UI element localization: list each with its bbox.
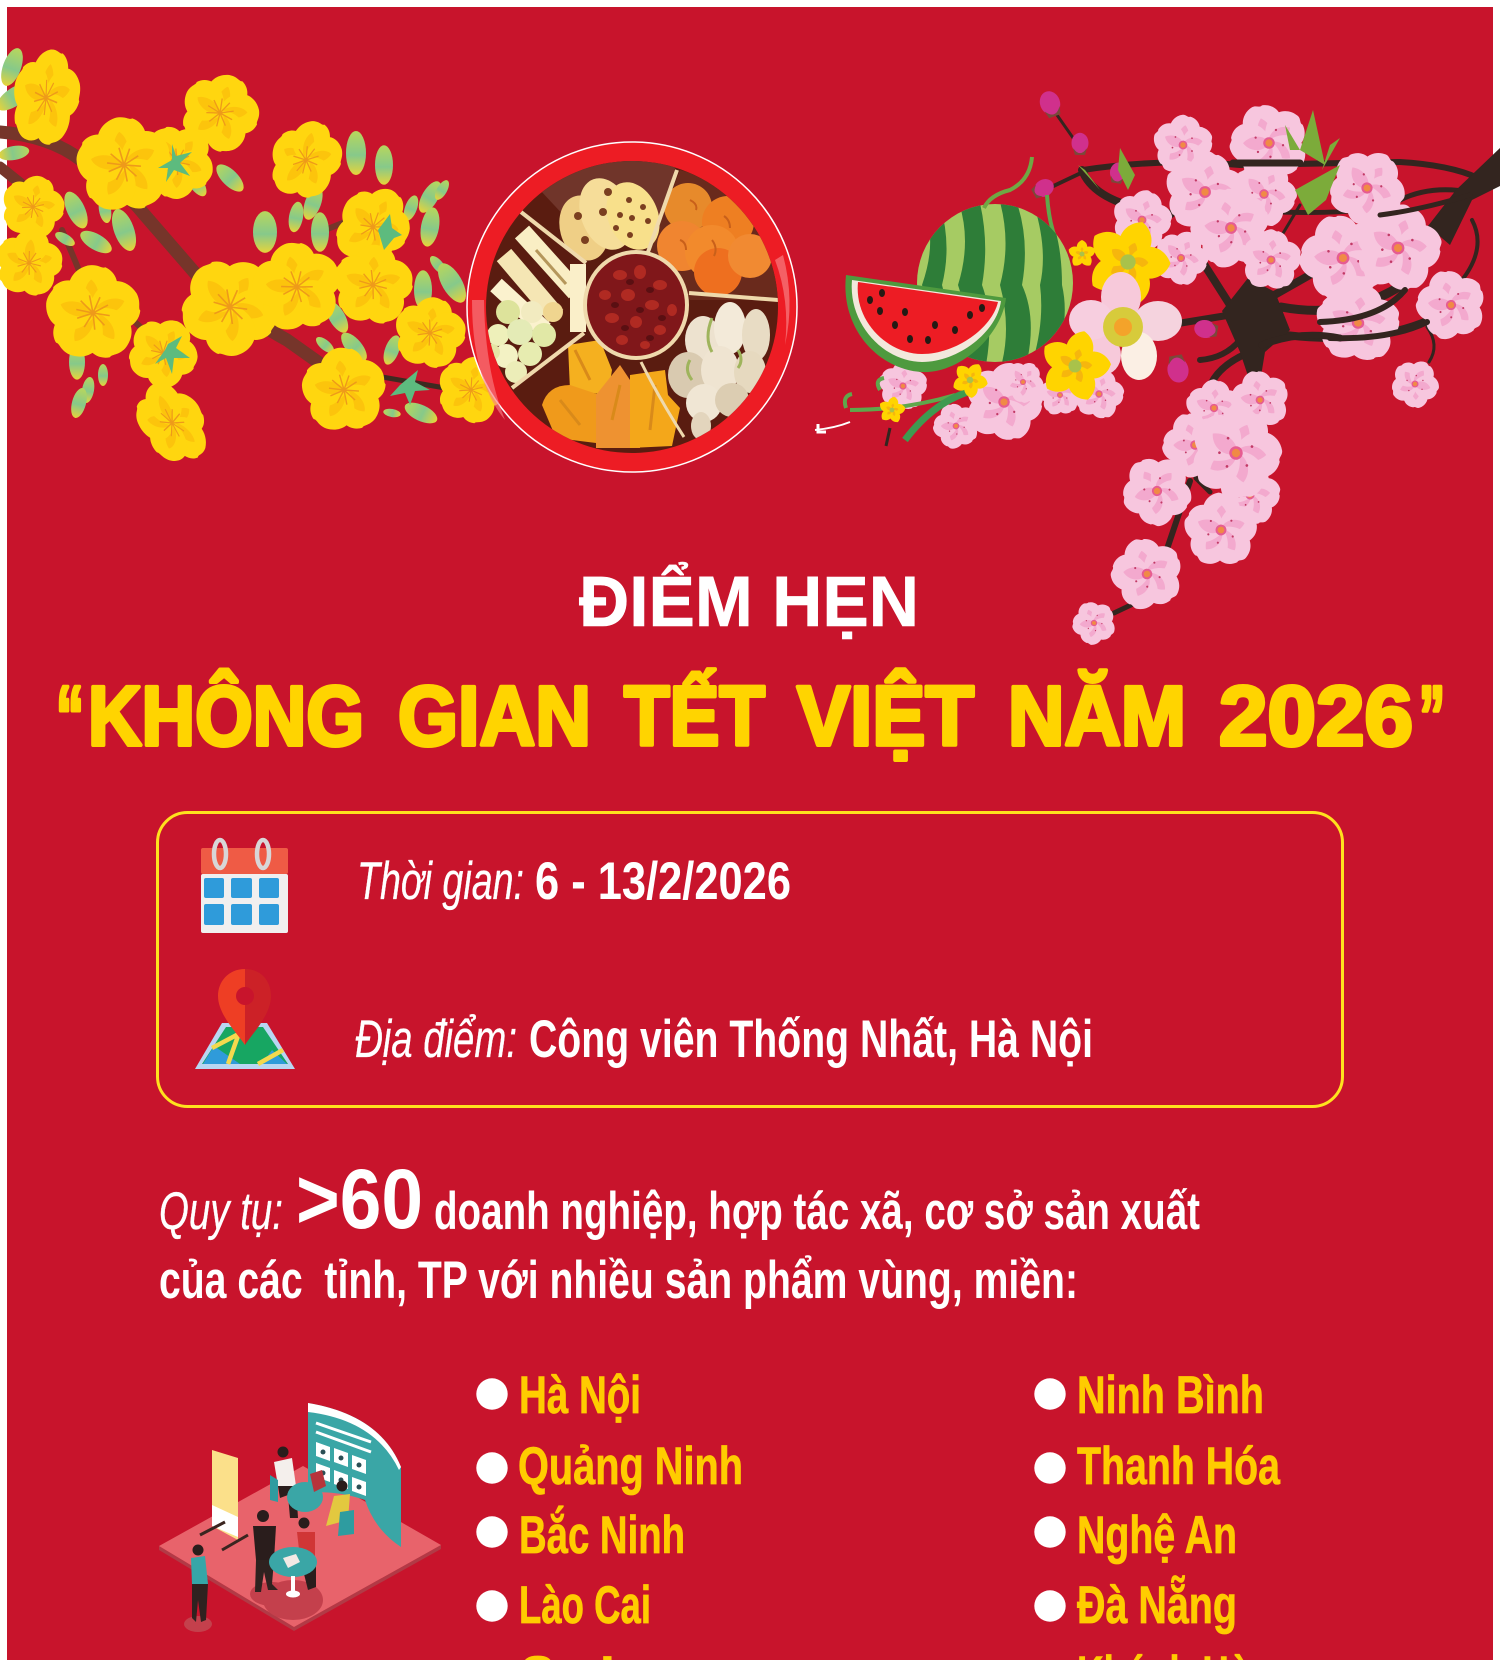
main title: GIAN [398,669,591,763]
shadows [184,1580,323,1632]
list of provinces right column: Đà Nẵng [1077,1574,1237,1635]
lotus root slices [559,178,660,260]
tree hub [1222,148,1500,382]
dark branches [1045,105,1478,613]
venue text [355,1010,1093,1069]
main title [56,669,1445,763]
list of provinces right column: Ninh Bình [1077,1366,1264,1425]
pink flowers lower cluster [1064,366,1301,654]
main title: NĂM [1008,669,1186,763]
list of provinces left column [476,1366,743,1660]
round table front [269,1547,317,1598]
dried pistachios [668,302,770,440]
green sepals [155,144,430,405]
venue text: Địa điểm: [355,1010,517,1069]
summary text: >60 [296,1152,423,1246]
time text [357,852,791,911]
compartment fill [542,161,675,216]
yellow and white flowers [875,207,1185,426]
main title: 2026 [1219,669,1413,763]
flowers beneath watermelon [871,350,1133,458]
round table back [287,1482,323,1512]
curved display wall [308,1403,401,1547]
centre bowl [585,252,687,358]
icon: calendar [201,840,288,933]
tray interior [486,161,778,453]
list of provinces right column: Nghệ An [1077,1506,1237,1565]
list of provinces right column: Thanh Hóa [1077,1437,1280,1496]
illustration: trade fair booth [159,1403,441,1632]
watermelon [845,157,1080,372]
seated woman [326,1480,354,1536]
dried apricots [657,183,772,296]
tray rim [467,142,797,472]
main title: VIỆT [797,669,974,763]
standing man in suit [253,1510,278,1592]
apricot blossom branch [0,43,516,483]
pink flowers upper [1099,94,1495,408]
yellow flowers [0,43,516,483]
candied ginger strips [496,232,578,332]
list of provinces right column [1034,1366,1280,1660]
visitor in teal [191,1544,208,1622]
standing woman in red [297,1518,316,1590]
buds [0,45,472,428]
main title: ” [1419,669,1445,763]
info box: time and venue [158,812,1342,1106]
small sprigs [815,195,1068,446]
icon: map pin [195,969,295,1069]
list of provinces left column: Lào Cai [519,1576,651,1635]
branches [0,132,445,388]
venue text: Công viên Thống Nhất, Hà Nội [529,1010,1093,1069]
summary text: Quy tụ: [159,1182,283,1241]
booth floor [159,1545,441,1631]
heading: Điểm hẹn: ĐIỂM HẸN [579,562,919,642]
melon slice [845,275,1006,372]
main title: KHÔNG [88,669,364,763]
peach blossom branch [815,88,1500,654]
leaves [1078,110,1340,215]
summary text: của các tỉnh, TP với nhiều sản phẩm vùng, miền: [159,1251,1078,1310]
time text: Thời gian: [357,852,524,911]
branch overlays [1233,163,1470,345]
main title: TẾT [624,669,765,763]
seated man [270,1446,298,1518]
whole melon [917,204,1073,362]
main title: “ [56,669,84,763]
summary text [159,1152,1200,1310]
dried persimmon pieces [542,340,680,448]
summary text: doanh nghiệp, hợp tác xã, cơ sở sản xuất [434,1182,1200,1241]
compartment dividers [512,170,790,437]
list of provinces left column: Bắc Ninh [519,1505,685,1565]
roll-up banner [212,1450,238,1540]
candied fruit tray [467,142,797,472]
list of provinces left column: Hà Nội [519,1366,641,1425]
pale candied fruit [484,300,563,383]
pink buds [1029,88,1393,384]
list of provinces left column: Quảng Ninh [518,1437,743,1496]
stem [984,157,1032,208]
time text: 6 - 13/2/2026 [535,852,791,911]
